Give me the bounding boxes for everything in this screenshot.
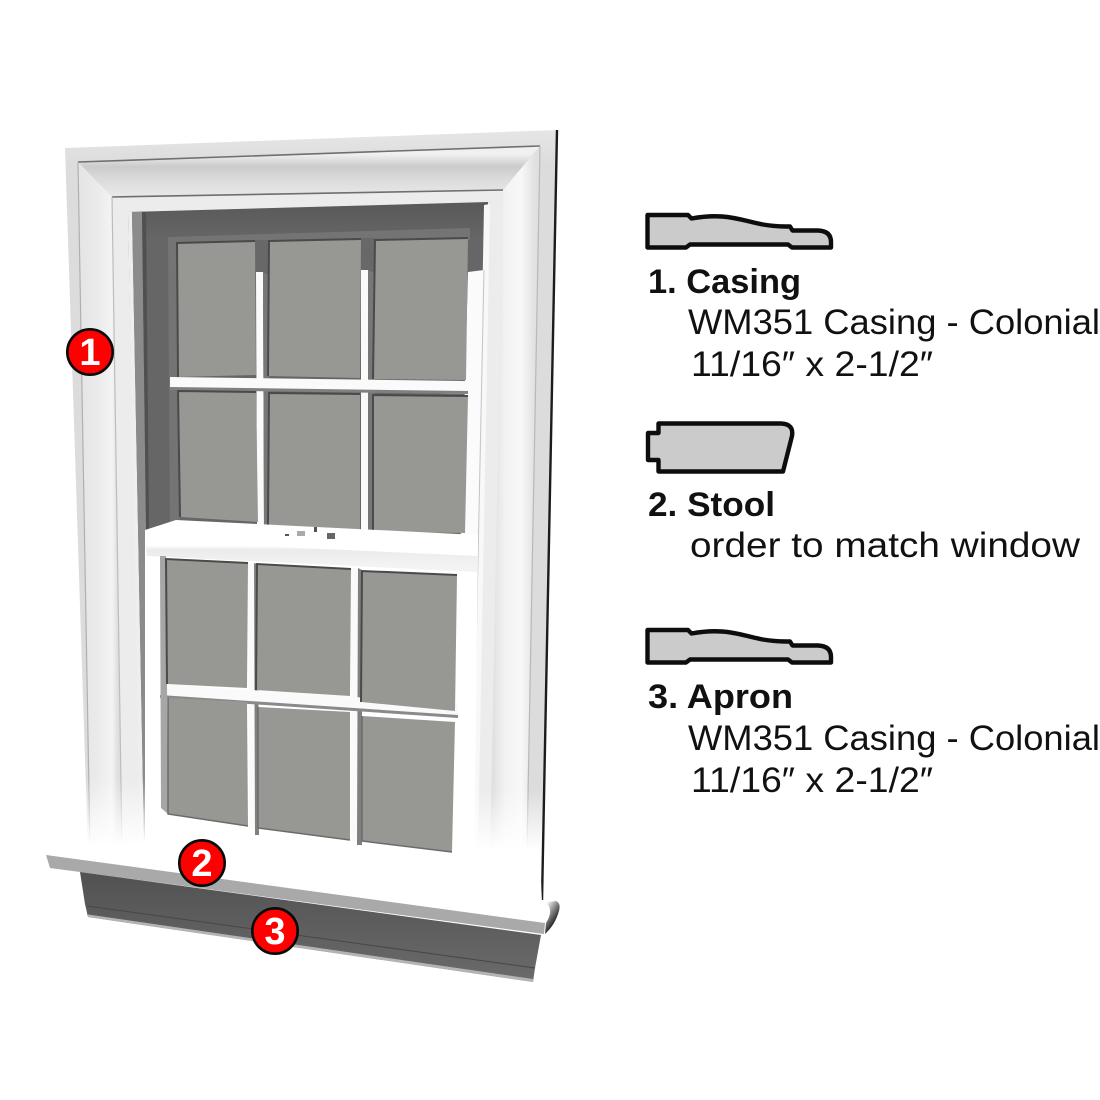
apron bbox=[80, 872, 541, 982]
right jamb bbox=[452, 204, 490, 850]
text: casing description bbox=[688, 303, 1100, 384]
lower sash bbox=[145, 520, 478, 880]
profile: apron bbox=[648, 630, 831, 662]
upper sash bbox=[168, 228, 470, 535]
heading: 1. Casing: 1. Casing bbox=[648, 263, 801, 301]
marker 3: 3 bbox=[264, 911, 286, 953]
marker 2: 2 bbox=[191, 843, 213, 885]
window opening bbox=[128, 202, 488, 840]
text: apron description bbox=[688, 719, 1100, 800]
casing molding bbox=[78, 146, 540, 850]
casing inner band bbox=[112, 190, 503, 860]
upper sash frame bbox=[168, 228, 470, 250]
lower sash muntins bbox=[160, 556, 458, 845]
marker 1 bbox=[67, 329, 113, 375]
text: apron description: 11/16″ x 2-1/2″ bbox=[691, 761, 933, 800]
casing outer band bbox=[65, 130, 557, 885]
lower sash frame bbox=[145, 520, 478, 880]
stool front edge bbox=[46, 855, 545, 934]
casing fade at sill bbox=[70, 780, 545, 885]
heading: 2. Stool: 2. Stool bbox=[648, 486, 775, 524]
meeting rail bbox=[145, 541, 478, 572]
stool top bbox=[46, 848, 556, 923]
heading: 3. Apron: 3. Apron bbox=[648, 678, 793, 716]
text: casing description: 11/16″ x 2-1/2″ bbox=[691, 345, 933, 384]
profile: stool bbox=[648, 424, 792, 472]
upper sash left stile bbox=[168, 237, 180, 530]
stool nose bbox=[541, 901, 560, 934]
marker 3 bbox=[252, 908, 298, 954]
profile: casing bbox=[648, 215, 831, 248]
text: stool description: order to match window bbox=[690, 526, 1081, 565]
stool bbox=[46, 848, 560, 934]
upper sash panes bbox=[177, 238, 468, 533]
text: apron description: WM351 Casing - Colonial bbox=[688, 719, 1100, 758]
casing right edge bbox=[542, 130, 557, 900]
sash latch bbox=[285, 527, 335, 539]
marker 1: 1 bbox=[79, 332, 101, 374]
upper sash muntins bbox=[170, 238, 468, 535]
illustration: window with trim bbox=[46, 130, 560, 982]
left jamb bbox=[128, 212, 152, 840]
text: casing description: WM351 Casing - Colonial bbox=[688, 303, 1100, 342]
lower sash panes bbox=[166, 559, 457, 852]
marker 2 bbox=[179, 840, 225, 886]
